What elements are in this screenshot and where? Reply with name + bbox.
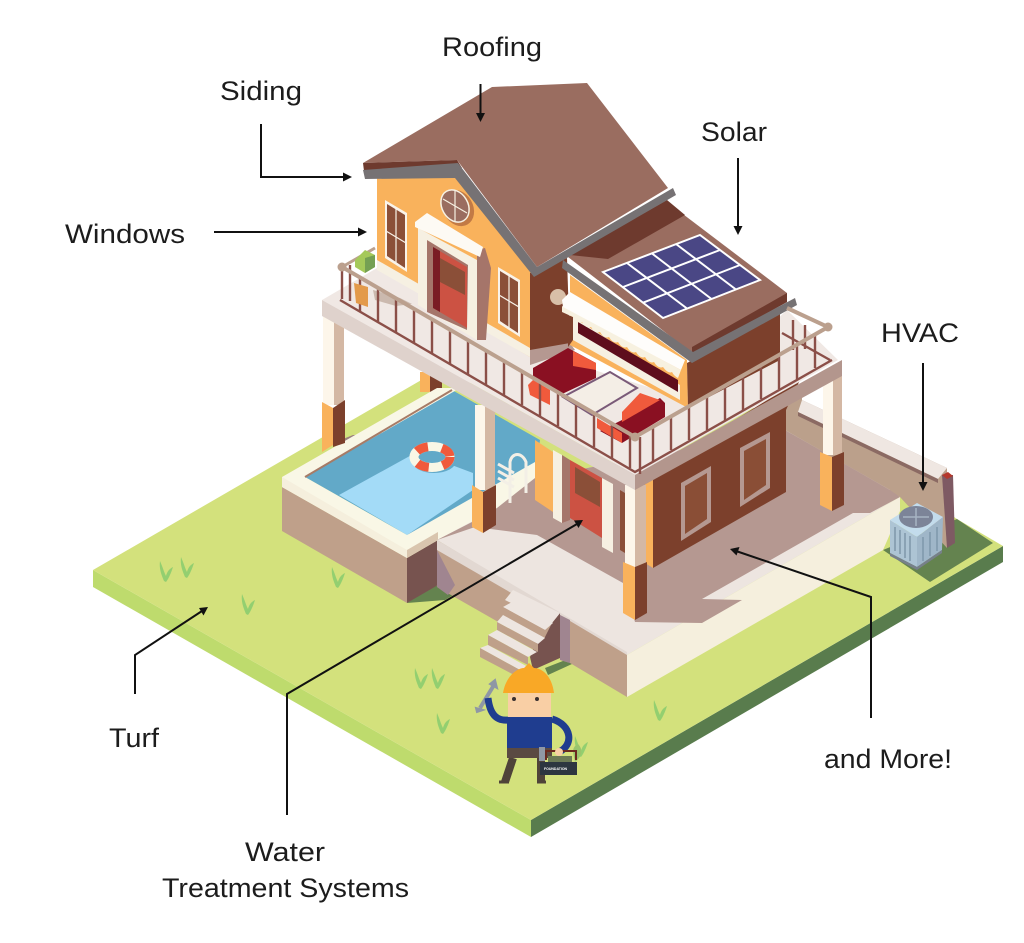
ground: lawn [93, 375, 1003, 837]
label: Siding: Siding [220, 76, 302, 106]
label: Turf: Turf [109, 723, 160, 753]
label: Windows: Windows [65, 219, 185, 249]
face and body [508, 693, 551, 717]
balcony railing [338, 248, 832, 474]
balcony deck [322, 268, 842, 490]
swimming pool [282, 372, 540, 603]
legs [505, 758, 541, 782]
toolbox: FOUNDATION [544, 767, 568, 771]
air conditioning unit [890, 503, 943, 570]
label: Solar: Solar [701, 117, 767, 147]
label: and More!: and More! [824, 744, 952, 774]
upper floor [363, 83, 797, 443]
arrow: HVAC [918, 363, 928, 491]
floor shadow [437, 430, 900, 623]
pool ladder [498, 454, 526, 503]
upper door [415, 213, 491, 340]
ground floor of house [535, 380, 800, 568]
terrace wall and window [570, 275, 688, 408]
round window [435, 184, 480, 232]
label: Roofing: Roofing [442, 32, 542, 62]
hard hat [503, 663, 554, 693]
support pillars [322, 315, 844, 620]
arrow: and More! [730, 547, 871, 718]
ground floor windows [681, 432, 770, 541]
arrow: Water Treatment Systems [287, 520, 583, 815]
stairs [480, 590, 560, 678]
back wall [785, 395, 955, 548]
arrow: Roofing [476, 84, 485, 122]
arrow: Windows [214, 228, 367, 236]
label: Water Treatment Systems: Treatment Systems [162, 873, 409, 903]
plant on balcony [354, 250, 375, 307]
right window [498, 267, 520, 337]
left window [385, 200, 407, 272]
label: HVAC: HVAC [881, 318, 959, 348]
label: Water Treatment Systems: Water [245, 837, 325, 867]
arrow: Turf [135, 607, 208, 694]
arms [488, 698, 569, 752]
upper wall [377, 177, 533, 357]
wrench [476, 680, 497, 712]
life ring [412, 446, 456, 473]
handyman figure [476, 663, 581, 782]
concrete patio slab [437, 430, 900, 697]
main roof [363, 83, 668, 267]
sofas and table [528, 348, 665, 443]
awning [550, 289, 685, 378]
lower roof [568, 202, 787, 353]
solar panel [603, 235, 760, 318]
arrow: Solar [734, 158, 742, 235]
arrow: Siding [261, 124, 352, 182]
label: Water Treatment Systems [162, 837, 409, 903]
